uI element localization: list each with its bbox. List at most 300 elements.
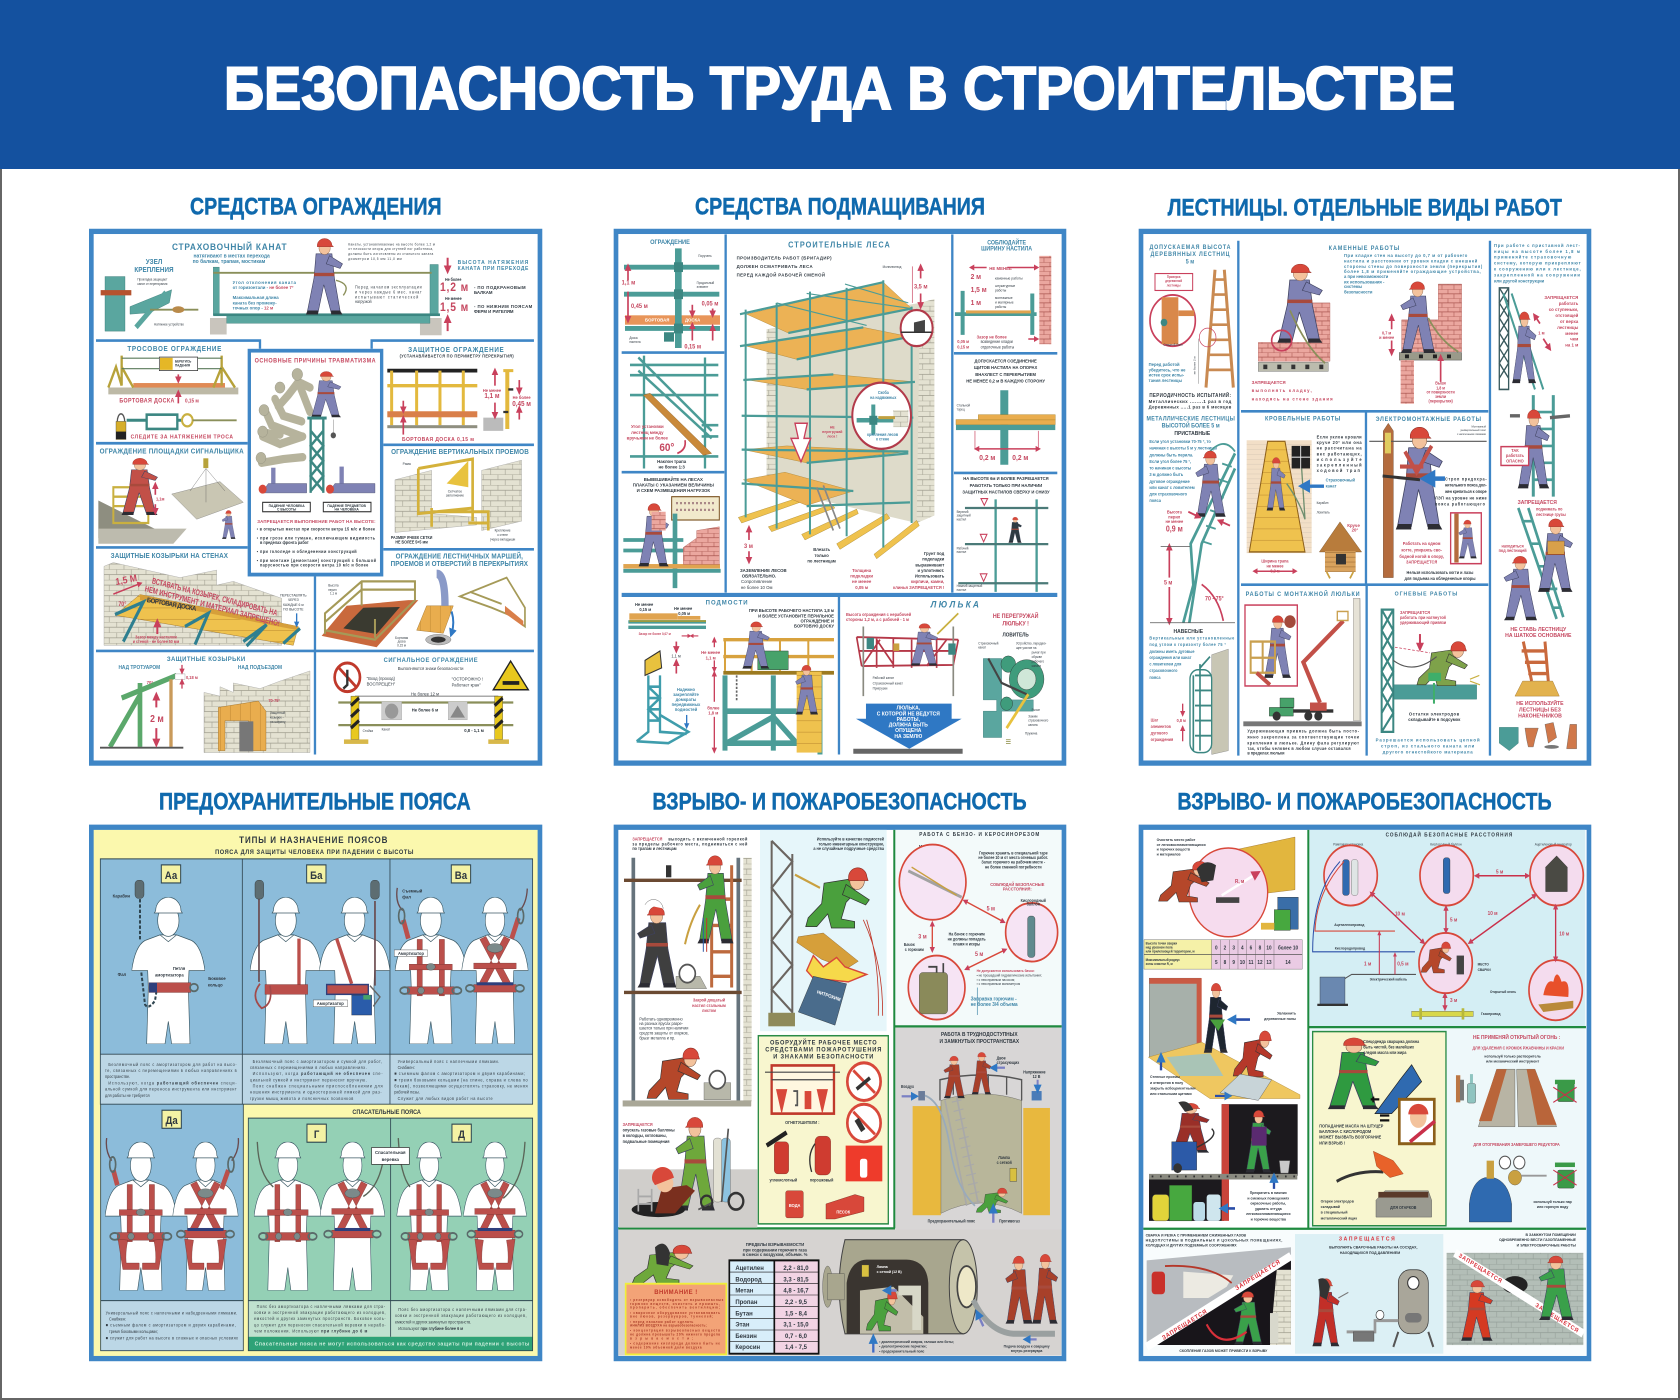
electrical work: Строп предохра- <box>1445 476 1487 482</box>
right column ladder rules: НАКОНЕЧНИКОВ <box>1518 713 1562 720</box>
confined spaces: Воздух <box>901 1084 915 1089</box>
clear area: 2 <box>1224 945 1227 952</box>
stages <box>628 599 834 754</box>
roofing work: 20° <box>1352 527 1358 533</box>
belt descriptions: емкостей и других замкнутых пространств. Боковое коль- <box>254 1316 386 1321</box>
railing detail <box>622 240 720 351</box>
main causes of injury: С ВЫСОТЫ <box>277 507 297 512</box>
hung ladders: Шаг <box>1151 717 1159 722</box>
main scaffold: НЕ <box>830 425 835 430</box>
safe distances diagram <box>1313 830 1583 1020</box>
railing detail: 0,15 м <box>684 344 702 351</box>
stages: ПРИ ВЫСОТЕ РАБОЧЕГО НАСТИЛА 1,8 м <box>749 608 834 613</box>
stair angle detail: Наклон трапа <box>657 459 687 464</box>
catcher device <box>978 641 1049 744</box>
hung ladders: ограждения или канат <box>1149 655 1191 660</box>
cradle <box>846 599 1038 754</box>
cradle work: Удерживающая привязь должна быть посто- <box>1247 728 1360 734</box>
metal ladders: ПРИСТАВНЫЕ <box>1174 431 1211 437</box>
figure Ва: фал <box>402 893 411 900</box>
hot work: Остатки электродов <box>1409 711 1460 716</box>
roofing work: Ловитель <box>1317 510 1330 515</box>
deck width: монтажные <box>995 296 1013 300</box>
roofing work: используйте <box>1317 457 1362 462</box>
electrical work: жен крепиться к опоре <box>1444 489 1487 494</box>
masonry work: а при невозможности <box>1344 274 1389 279</box>
welder warning <box>626 1244 726 1354</box>
deck width <box>955 238 1051 349</box>
scaffold welding scene <box>623 836 752 1106</box>
main scaffold <box>737 240 945 590</box>
hung ladders: 0,8 м <box>1177 718 1186 723</box>
electrical work: для подъема на обледенелые опоры <box>1404 576 1476 581</box>
oil warning box: Огарки электродов <box>1321 1199 1355 1203</box>
main scaffold: подкладки <box>922 556 945 562</box>
tower and barrel: а не случайные подручные средства <box>813 846 885 851</box>
electrical work: когте, упираясь сво- <box>1401 547 1442 553</box>
right column ladder rules: менее <box>1565 331 1579 336</box>
figure Ва: Амортизатор <box>398 951 424 956</box>
bottom prohibitions: СКОПЛЕНИЕ ГАЗОВ МОЖЕТ ПРИВЕСТИ К ВЗРЫВУ <box>1179 1349 1268 1353</box>
figure Aa: Карабин <box>113 892 130 899</box>
electrical work: с наплечными лямками <box>1457 432 1486 436</box>
oil warning box: быть чистой, без малейших <box>1363 1044 1415 1050</box>
roofing work: не менее <box>1266 563 1284 568</box>
hung ladders: пояса <box>1149 675 1161 680</box>
belt descriptions: Безлямочный пояс с амортизатором для работ на высо- <box>108 1062 237 1067</box>
deck width: 0,05 м <box>957 339 969 344</box>
railing detail: Доска <box>629 336 638 340</box>
cradle work <box>1243 590 1362 756</box>
masonry work: их использования - <box>1344 279 1385 284</box>
main scaffold: Сопротивление <box>741 579 773 584</box>
confined spaces: Противогаз <box>999 1218 1020 1223</box>
masonry work: от поверхности <box>1427 389 1455 395</box>
protective railing: Не более <box>513 395 531 400</box>
deck width: 1 м <box>971 298 981 307</box>
type labels: Да <box>166 1116 178 1127</box>
belt descriptions: Используют, когда работающий не обеспечен спе- <box>253 1071 383 1076</box>
canopies over sidewalk <box>100 656 310 753</box>
fire equipment box: порошковый <box>810 1177 834 1183</box>
electrical work: пояса работающего <box>1435 501 1485 507</box>
frame <box>616 827 1064 1359</box>
clear area: 11 <box>1249 960 1254 966</box>
rope height: ФЕРМ И РИГЕЛЯМ <box>474 309 514 314</box>
clear area: от легковоспламеняющихся <box>1157 843 1206 847</box>
fire equipment box: ВОДА <box>789 1203 800 1208</box>
explosive limits table: 3,1 - 15,0 <box>783 1321 809 1329</box>
cradle work: в пределах люльки <box>1247 750 1285 756</box>
right column ladder rules: ОПАСНО <box>1506 458 1524 463</box>
confined spaces: Лампа <box>998 1155 1011 1160</box>
wooden ladders: деревянной <box>1165 279 1182 283</box>
bottom prohibitions: ЗАПРЕЩАЕТСЯ <box>1162 1309 1208 1342</box>
safety rope: должны быть изготовлены из стального каната <box>348 252 433 256</box>
petrol cutter: ▪ не прошедший гидравлические испытания; <box>977 973 1042 978</box>
main scaffold: выравнивают <box>915 562 945 567</box>
anchor knot: УЗЕЛ <box>146 259 163 266</box>
stages: 0,15 м <box>639 607 651 612</box>
catcher device: Рычаг <box>1032 708 1041 712</box>
right column ladder rules: ТАК <box>1511 448 1519 453</box>
frame <box>616 231 1064 763</box>
wooden ladders: ПЕРИОДИЧНОСТЬ ИСПЫТАНИЙ: <box>1149 391 1231 399</box>
explosive limits table: ПРЕДЕЛЫ ВЗРЫВАЕМОСТИ <box>746 1242 804 1247</box>
confined spaces: Напряжение <box>1023 1069 1046 1075</box>
figure Aa: Фал <box>118 972 126 977</box>
figure Ба <box>250 880 390 1044</box>
bottom prohibitions: В ЗАМКНУТОМ ПОМЕЩЕНИИ <box>1526 1233 1576 1237</box>
welding above storage: и горючие вещества <box>1251 1217 1287 1222</box>
floor protection: или стальными щитами <box>1150 1092 1192 1096</box>
type labels: Ва <box>455 870 467 882</box>
stages: закрепляйте <box>673 691 699 697</box>
figure Aa: кольцо <box>208 982 223 987</box>
clear area: 9 <box>1232 960 1235 966</box>
clear area <box>1144 837 1302 969</box>
electrical work: универсальный пояс <box>1460 428 1487 432</box>
rope height: 1,2 м <box>440 282 468 294</box>
cradle work: РАБОТЫ С МОНТАЖНОЙ ЛЮЛЬКИ <box>1246 590 1360 598</box>
belt descriptions: ховки и экстренной эвакуации работающего из колодцев, <box>254 1310 386 1315</box>
right column ladder rules: 1 м <box>1538 330 1545 336</box>
roofing work <box>1247 416 1362 578</box>
signaller platform <box>98 448 244 544</box>
electrical work: ЛЭП на уровне не ниже <box>1435 495 1487 500</box>
catcher device: обрыве <box>1032 655 1042 659</box>
figure Да <box>105 1138 238 1290</box>
wall canopies: 1,5 М <box>115 572 138 587</box>
oil warning box: ДЛЯ ОГАРКОВ <box>1390 1205 1417 1210</box>
right column ladder rules: систему, которую прикрепляют <box>1494 260 1581 266</box>
safe distances diagram: 0,5 м <box>1397 961 1409 967</box>
deck width: 0,15 м <box>957 344 969 349</box>
bottom prohibitions <box>1146 1233 1583 1353</box>
confined spaces: Двое <box>997 1055 1006 1060</box>
explosive limits table: Водород <box>735 1276 762 1284</box>
cylinders and manhole: ЗАПРЕЩАЕТСЯ <box>623 1122 653 1127</box>
clear area: и материалов <box>1157 852 1181 857</box>
figure Aa: Боковое <box>208 976 226 981</box>
main scaffold: СТРОИТЕЛЬНЫЕ ЛЕСА <box>788 240 890 250</box>
stair angle detail: Угол установки <box>631 424 664 429</box>
deck width: каменные работы <box>995 276 1023 281</box>
hot work: складывайте в подсумок <box>1408 716 1461 722</box>
roofing work: КРОВЕЛЬНЫЕ РАБОТЫ <box>1265 416 1341 422</box>
hot work: работать при натянутой <box>1400 615 1446 620</box>
rope height: Не менее <box>445 296 462 301</box>
electrical work: Монтажный <box>1471 424 1486 429</box>
protective railing: (УСТАНАВЛИВАЕТСЯ ПО ПЕРИМЕТРУ ПЕРЕКРЫТИЯ) <box>400 353 514 359</box>
deck width: ШИРИНУ НАСТИЛА <box>981 246 1032 253</box>
fire equipment box: ОГНЕТУШИТЕЛИ : <box>785 1120 820 1125</box>
main scaffold: 3 м <box>744 544 753 550</box>
electrical work: Нельзя использовать когти и лазы <box>1407 570 1474 575</box>
vertical openings: НЕ БОЛЕЕ 5×5 мм <box>395 539 428 544</box>
bottom prohibitions: ЗАПРЕЩАЕТСЯ <box>1534 1303 1579 1335</box>
main scaffold: ПЕРЕД КАЖДОЙ РАБОЧЕЙ СМЕНОЙ <box>737 270 825 278</box>
welder warning: горючих веществ, очистить и промыть, <box>630 1302 720 1306</box>
catcher device: каната <box>1028 723 1038 727</box>
stages: Не менее <box>674 606 693 611</box>
belt descriptions: для работы не требуется <box>105 1093 150 1098</box>
cable fence <box>108 346 238 441</box>
safe distances diagram: СВАРКИ <box>1478 968 1491 972</box>
protective decking: Рабочий <box>957 546 969 550</box>
belt descriptions: Используют при глубине более 6 м <box>398 1326 463 1331</box>
catcher device: Устройство, передаю- <box>1016 641 1046 646</box>
hot work <box>1376 591 1480 754</box>
wooden ladders: лестницы <box>1167 283 1181 287</box>
fire equipment box <box>758 1036 888 1224</box>
safe distances diagram: Рамповая установка <box>1333 842 1363 846</box>
welder warning: менее 19% объемной доли воздуха <box>630 1345 702 1349</box>
clear area: 3 <box>1232 945 1235 952</box>
belt descriptions: Универсальный пояс с наплечными и набедренными лямками. <box>106 1310 237 1316</box>
signal fencing: "ОСТОРОЖНО ! <box>452 676 483 682</box>
confined spaces: 12 В <box>1033 1074 1041 1079</box>
belt descriptions: пространстве. <box>105 1074 130 1079</box>
cradle: ЛЮЛЬКА, <box>896 705 921 712</box>
scaffold welding scene: настил стальным <box>692 1003 726 1008</box>
clear area: и горючих веществ <box>1157 847 1191 852</box>
hung ladders: должны иметь дуговые <box>1149 649 1195 654</box>
scaffold welding scene: по трапам и лестницам <box>632 846 677 851</box>
wooden ladders: Перед работой <box>1149 361 1180 367</box>
right column ladder rules: или другой конструкции <box>1494 277 1545 284</box>
oil warning box: ИЛИ ВЗРЫВ ! <box>1319 1140 1345 1146</box>
petrol cutter: Бачок <box>904 942 915 947</box>
tower and barrel: только инвентарные конструкции, <box>818 841 884 846</box>
wall canopies: КАЖДЫЕ 6 м <box>283 603 304 607</box>
metal ladders: начиная с высоты 5 м у лестницы <box>1149 445 1217 451</box>
scaffold welding scene: шается только при наличии <box>639 1025 688 1031</box>
clear area: Очистить место работ <box>1157 838 1195 842</box>
fire equipment box: углекислотный <box>770 1177 798 1183</box>
electrical work: ЗАПРЕЩАЕТСЯ <box>1406 559 1437 565</box>
electrical work: ЭЛЕКТРОМОНТАЖНЫЕ РАБОТЫ <box>1376 417 1481 423</box>
no open flame: используй только растворитель <box>1484 1054 1541 1059</box>
heading: ВЗРЫВО- И ПОЖАРОБЕЗОПАСНОСТЬ <box>652 788 1027 815</box>
welder warning: ▪ концентрация взрывоопасных веществ <box>630 1328 720 1333</box>
railing detail: настила <box>629 340 641 344</box>
wall canopies: ЧЕРЕЗ <box>288 598 299 602</box>
wall canopies: ПО ВЫСОТЕ <box>283 608 304 612</box>
welder warning: ▪ содержание кислорода должно быть не <box>630 1341 720 1345</box>
deck overlap <box>956 358 1055 465</box>
main scaffold: по лестницам <box>807 558 836 564</box>
protective decking: защитный <box>957 513 971 518</box>
masonry work: выполнять кладку, <box>1252 388 1312 393</box>
canopies over sidewalk: 70° <box>147 680 153 685</box>
hot work: ЗАПРЕЩАЕТСЯ <box>1400 610 1430 615</box>
clear area: 14 <box>1285 960 1291 966</box>
safety rope: от плоскости опоры для ступней ног работника, <box>348 247 433 251</box>
anchor knot: Прокладка защищает <box>137 278 168 282</box>
hot work: удерживающей привязи <box>1400 620 1447 625</box>
cable fence: ПАДЕНИЯ <box>175 363 191 368</box>
wall canopies: и стеной - не более 50 мм <box>133 639 179 644</box>
oil warning box: складывай <box>1321 1205 1341 1209</box>
clear area: R, м <box>1235 879 1245 885</box>
wall canopies: БОРТОВАЯ ДОСКА <box>146 597 197 613</box>
oil warning box <box>1313 1032 1446 1226</box>
signal fencing <box>335 657 528 744</box>
type labels: Ба <box>310 870 323 882</box>
stages: более <box>707 704 720 710</box>
wall canopies: ЗАЩИТНЫЕ КОЗЫРЬКИ НА СТЕНАХ <box>111 553 228 560</box>
cable fence: 0,15 м <box>185 398 199 405</box>
tank with workers: с сеткой (12 В) <box>877 1270 902 1274</box>
signal fencing: СИГНАЛЬНОЕ ОГРАЖДЕНИЕ <box>384 657 478 664</box>
belt descriptions: ■ съемным фалом с амортизатором и двумя карабинами; <box>394 1071 525 1076</box>
masonry work: стороны стены до поверхности земли (перекрытия) <box>1344 264 1483 269</box>
petrol cutter: не более 10 м от места огневых работ. <box>978 855 1048 860</box>
stair angle detail <box>627 356 718 470</box>
belt descriptions <box>105 1059 528 1340</box>
main scaffold: перегружай <box>822 430 843 434</box>
belt descriptions: те, связанных с перемещениями в любых направлениях в <box>105 1068 237 1073</box>
petrol cutter: ▪ с неисправным манометром <box>977 982 1021 986</box>
explosive limits table: Метан <box>735 1287 754 1295</box>
protective decking: Нижний защитный <box>957 584 982 588</box>
stages: ОГРАЖДЕНИЕ И <box>801 618 834 623</box>
petrol cutter: ▪ с неисправным насосом; <box>977 978 1015 982</box>
railing detail: 1,1 м <box>622 280 636 287</box>
deck overlap: 0,2 м <box>1012 453 1028 462</box>
petrol cutter: пламя и искры <box>953 941 981 946</box>
safe distances diagram: 10 м <box>1488 911 1498 917</box>
electrical work: Работать на одном <box>1403 541 1440 546</box>
stages: Надежно <box>677 687 695 692</box>
protective decking: Верхний <box>957 510 969 514</box>
rope height: 1,5 м <box>440 301 468 314</box>
header band <box>0 0 1680 169</box>
type labels <box>161 865 471 1142</box>
bottom prohibitions: ЗАПРЕЩАЕТСЯ <box>1339 1236 1396 1243</box>
metal ladders: Высота <box>1167 509 1182 515</box>
wall canopies <box>104 553 307 646</box>
belt descriptions: ■ съемным фалом с амортизатором и двумя карабинами, <box>106 1322 236 1328</box>
right column ladder rules: под лестницей <box>1499 548 1527 553</box>
safety rope: Перед началом эксплуатации <box>355 284 422 290</box>
wall canopies: 70° <box>118 602 127 608</box>
explosive limits table: 4,8 - 16,7 <box>783 1287 809 1295</box>
signal fencing: "Вход (проход) <box>367 676 395 681</box>
welder warning: пропарить, обеспечить вентиляцию; <box>630 1305 720 1310</box>
vertical openings: Рама <box>403 462 411 466</box>
railing detail: ДОСКА <box>685 317 701 322</box>
metal ladders: дуговое ограждение <box>1149 479 1190 484</box>
main scaffold: только <box>815 553 829 558</box>
cradle: Пригрузки <box>873 686 888 690</box>
electrical work <box>1369 417 1487 581</box>
stair angle detail: вручьями не более <box>627 434 668 441</box>
right column ladder rules: НА ШАТКОЕ ОСНОВАНИЕ <box>1505 633 1572 639</box>
heading: СРЕДСТВА ОГРАЖДЕНИЯ <box>190 193 442 220</box>
stair angle detail: лестниц между <box>631 430 664 435</box>
oil warning box: Спецодежда сварщика должна <box>1363 1039 1420 1044</box>
anchor knot: Натяжное устройство <box>154 322 184 327</box>
clear area: Максимальный радиус <box>1146 958 1180 962</box>
safe distances diagram: 5 м <box>1450 917 1458 923</box>
railing detail: 0,45 м <box>631 304 648 310</box>
clear area: зоны очистки R, м <box>1146 962 1173 966</box>
safe distances diagram: Ацетиленовый генератор <box>1535 842 1572 846</box>
main scaffold: Скоба <box>878 390 890 395</box>
safe distances diagram: 10 м <box>1559 931 1570 937</box>
explosive limits table: Бензин <box>735 1333 757 1340</box>
hung ladders: под углом к горизонту более 75 ° <box>1149 642 1226 647</box>
tank with workers: внутрь резервуара <box>1011 1349 1042 1353</box>
heading: ПРЕДОХРАНИТЕЛЬНЫЕ ПОЯСА <box>159 788 471 815</box>
cylinders and manhole: в колодцы, котлованы, <box>623 1133 667 1138</box>
canopies over sidewalk: на ширину <box>270 720 286 724</box>
explosive limits table: 1,4 - 7,5 <box>785 1344 807 1351</box>
stages: Зазор не более 0,07 м <box>639 632 671 636</box>
right column ladder rules: ницы на высоте более 1,8 м <box>1494 248 1580 254</box>
catcher device: щее усилие на <box>1016 646 1037 650</box>
roofing work: Ширина трапа <box>1261 558 1289 564</box>
signal fencing: Не более 6 м <box>412 706 438 713</box>
cylinders and manhole: подвальные помещения <box>623 1139 670 1144</box>
protective railing: ЗАЩИТНОЕ ОГРАЖДЕНИЕ <box>408 347 504 354</box>
safety rope <box>172 239 442 335</box>
explosive limits table: в смеси с воздухом, объемн. % <box>742 1251 808 1257</box>
panel: взрыво- и пожаробезопасность (расстояния) <box>1141 788 1589 1359</box>
petrol cutter: не более 3/4 объема <box>971 1001 1018 1008</box>
belt descriptions: грузки мышц живота и поясничных позвонков <box>250 1096 353 1101</box>
metal ladders: Если угол установки 70-75 °, то <box>1149 439 1211 444</box>
wooden ladders: тания лестницы <box>1149 378 1182 383</box>
bottom prohibitions: НЕДОПУСТИМЫ В ПОДВАЛЬНЫХ И ЦОКОЛЬНЫХ ПОМЕЩЕНИЯХ, <box>1146 1238 1282 1243</box>
signal fencing: Канат <box>382 727 391 731</box>
main scaffold: леса ! <box>827 434 837 439</box>
petrol cutter: Кислородный <box>1021 898 1046 903</box>
petrol cutter: Место резки <box>919 844 942 849</box>
main scaffold: 3,5 м <box>914 284 928 291</box>
section titles: ПОЯСА ДЛЯ ЗАЩИТЫ ЧЕЛОВЕКА ПРИ ПАДЕНИИ С ВЫСОТЫ <box>215 850 414 856</box>
signal fencing: Выполняются знаки безопасности <box>398 666 464 671</box>
petrol cutter: Не допускается использовать бачок: <box>977 969 1035 973</box>
stages: передвижных <box>672 702 701 707</box>
safety rope: натягивают в местах перехода <box>194 253 270 259</box>
belt descriptions: Пояс без амортизатора с наплечными лямками для стра- <box>398 1307 527 1312</box>
wall canopies: ПЕРЕСТАВЛЯТЬ <box>280 593 307 597</box>
hung ladders: НАВЕСНЫЕ <box>1174 629 1204 635</box>
safety rope: от горизонтали - не более 7° <box>233 284 294 290</box>
railing detail: Продольный <box>697 281 714 285</box>
main causes of injury: ▪ при гололеде и обледенении конструкций <box>257 549 357 554</box>
protective decking: РАБОТАТЬ ТОЛЬКО ПРИ НАЛИЧИИ <box>970 483 1042 488</box>
metal ladders: перил <box>1168 514 1181 520</box>
welding above storage: и смежных помещениях <box>1247 1196 1290 1200</box>
canopies over sidewalk: НАД ПОДЪЕЗДОМ <box>238 665 282 671</box>
right column ladder rules: к сооружению или к лестнице, <box>1494 266 1581 272</box>
deck overlap: 0,2 м <box>979 453 995 462</box>
cradle: Страховочный канат <box>873 681 903 686</box>
belt descriptions: ховки и экстренной эвакуации работающего из колодцев, <box>395 1313 527 1318</box>
masonry work: 0,7 м <box>1382 330 1391 336</box>
vertical openings: Крепление <box>495 529 511 533</box>
masonry work: и менее <box>1379 335 1395 340</box>
stair and floor openings: Высота <box>328 583 339 588</box>
metal ladders: ВЫСОТОЙ БОЛЕЕ 5 м <box>1162 421 1220 430</box>
belt descriptions: цо служит для переноски спасательной веревки в нерабо- <box>254 1322 386 1328</box>
figure Ба: Амортизатор <box>317 1001 344 1006</box>
anchor knot: канат от перетирания <box>137 282 168 286</box>
